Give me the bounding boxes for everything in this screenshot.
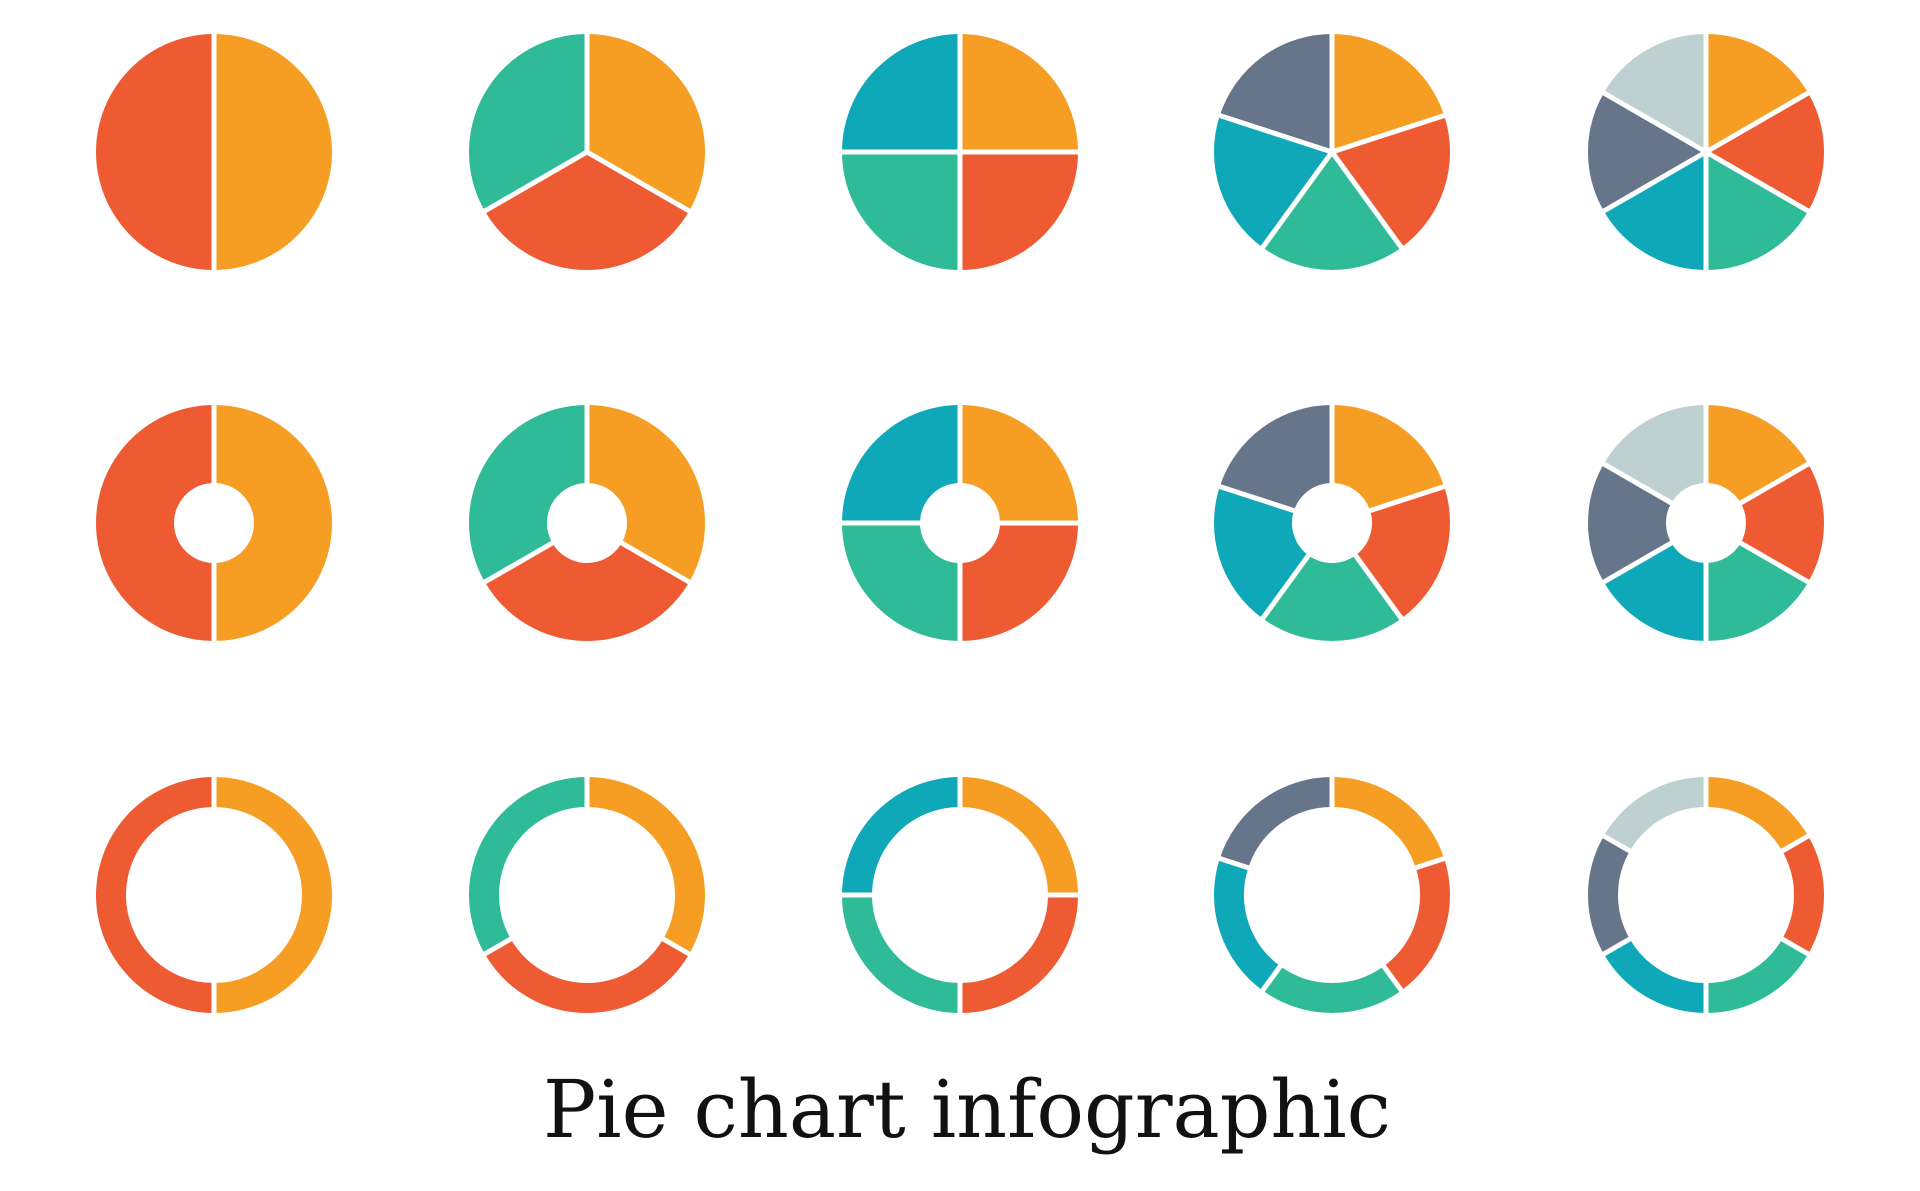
ring chart: 2 segments <box>111 770 317 1020</box>
pie chart: 2 segments <box>155 27 273 277</box>
ring chart: 3 segments <box>446 754 728 1036</box>
row 1: pie charts <box>155 27 1814 277</box>
pie chart: 6 segments <box>1598 27 1814 277</box>
pie chart: 5 segments <box>1213 27 1451 253</box>
donut chart: 3 segments <box>479 398 695 631</box>
title: Pie chart infographic <box>543 1063 1391 1156</box>
donut chart: 6 segments <box>1598 398 1814 648</box>
pie chart: 3 segments <box>479 27 695 233</box>
row 2: thick donut charts <box>135 398 1814 648</box>
pie chart: 4 segments <box>835 27 1085 277</box>
row 3: thin ring charts <box>111 751 1847 1039</box>
donut chart: 4 segments <box>835 398 1085 648</box>
donut chart: 2 segments <box>135 398 293 648</box>
donut chart: 5 segments <box>1213 398 1451 633</box>
ring chart: 6 segments <box>1565 754 1847 1036</box>
ring chart: 5 segments <box>1188 751 1476 1039</box>
ring chart: 4 segments <box>835 770 1085 1020</box>
